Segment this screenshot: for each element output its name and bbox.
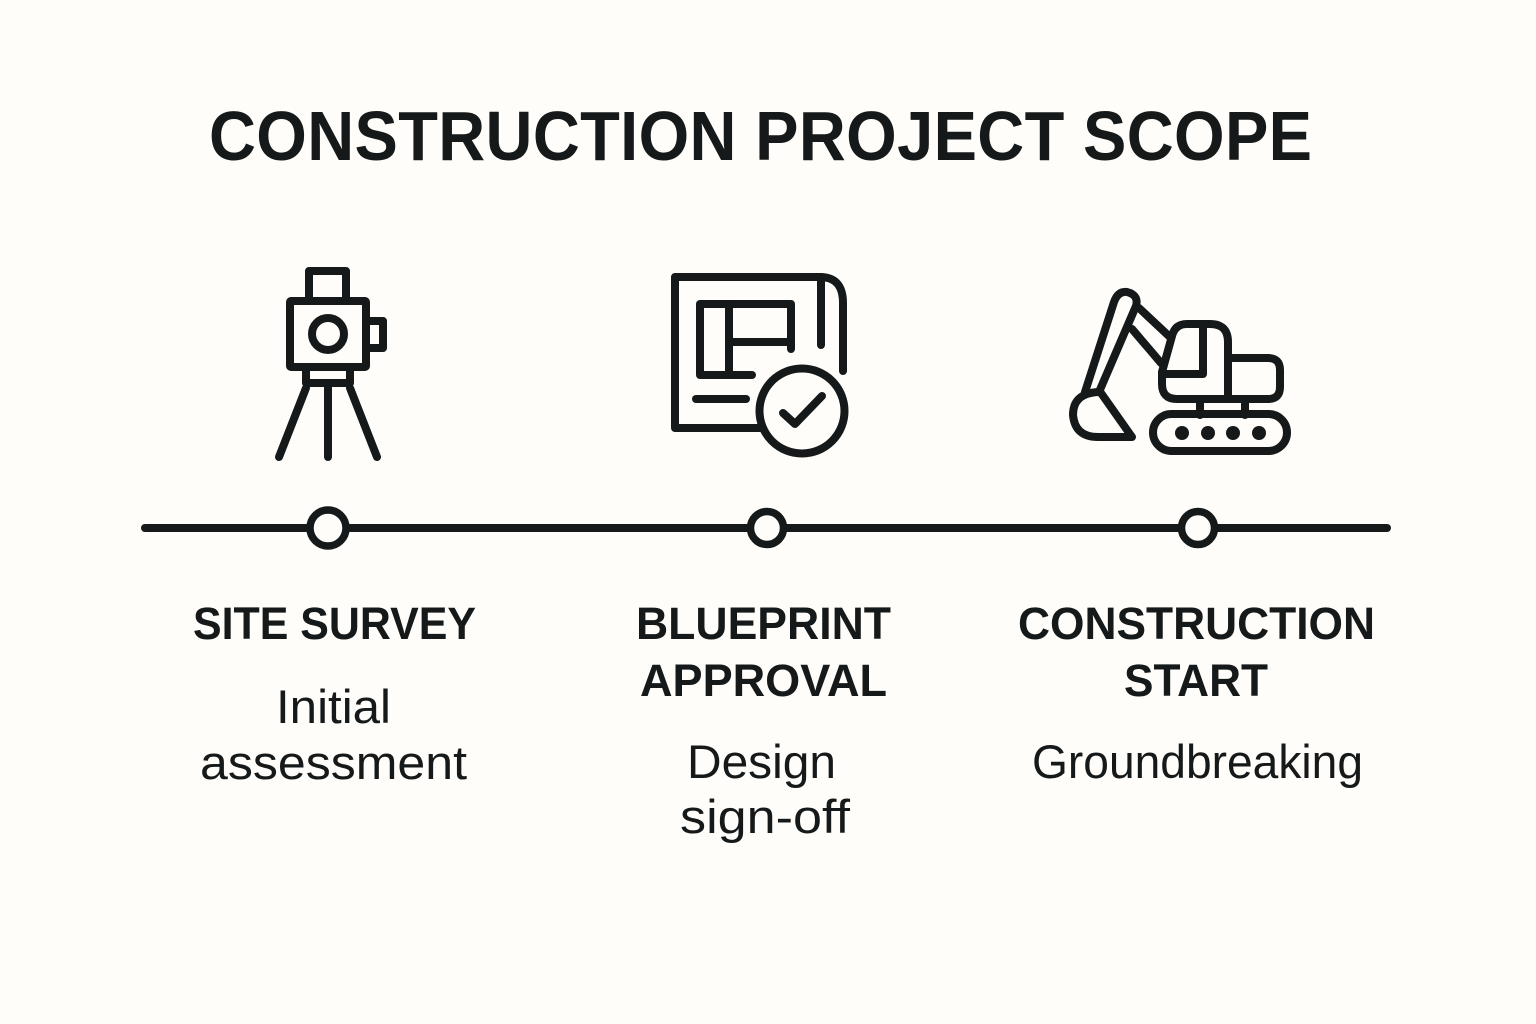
step: construction start: Groundbreaking [1032, 735, 1363, 788]
step: construction start: START [1124, 655, 1268, 706]
step: blueprint approval: Design [687, 735, 836, 788]
step: site survey: assessment [200, 736, 467, 789]
step: site survey: Initial [276, 680, 391, 733]
step: blueprint approval: sign-off [680, 790, 851, 843]
step: site survey [193, 598, 476, 789]
step: construction start [1018, 598, 1375, 788]
step: construction start: CONSTRUCTION [1018, 598, 1375, 649]
step: blueprint approval: APPROVAL [640, 655, 887, 706]
icon: approved blueprint [675, 277, 844, 454]
icon: surveying total station on tripod [279, 271, 383, 457]
title: CONSTRUCTION PROJECT SCOPE [209, 98, 1312, 175]
timeline [145, 510, 1387, 546]
step: blueprint approval [636, 598, 891, 843]
icon: excavator [1073, 292, 1287, 451]
step: site survey: SITE SURVEY [193, 598, 476, 649]
step: blueprint approval: BLUEPRINT [636, 598, 891, 649]
